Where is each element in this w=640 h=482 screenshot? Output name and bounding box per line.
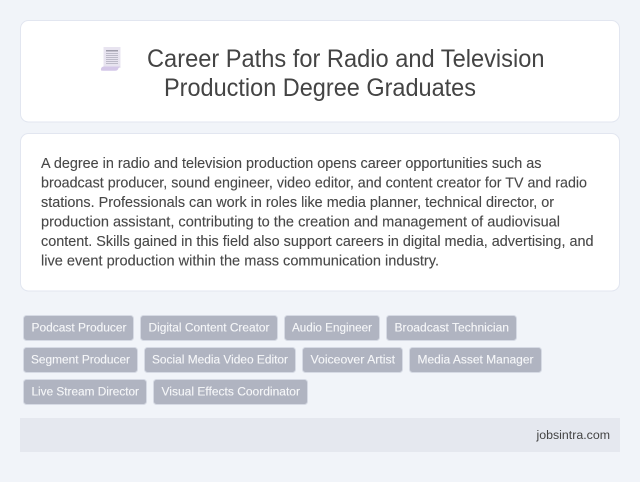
tag: Visual Effects Coordinator bbox=[154, 380, 308, 404]
text block: description: live event production within the mass communication industry. bbox=[41, 254, 439, 270]
panel: title card bbox=[20, 20, 620, 122]
tag: Live Stream Director: Live Stream Director bbox=[32, 384, 139, 398]
title: Career Paths for Radio and Television bbox=[147, 45, 544, 73]
tag: Live Stream Director bbox=[24, 380, 146, 404]
tag: Audio Engineer bbox=[284, 316, 380, 340]
tag: Segment Producer bbox=[24, 348, 138, 372]
tag: Social Media Video Editor bbox=[144, 348, 296, 372]
tag: Visual Effects Coordinator: Visual Effects Coordinator bbox=[162, 384, 300, 398]
panel: career tags bbox=[24, 316, 542, 404]
tag: Media Asset Manager: Media Asset Manager bbox=[418, 352, 534, 366]
tag: Voiceover Artist: Voiceover Artist bbox=[310, 352, 396, 366]
title: Production Degree Graduates bbox=[164, 74, 476, 102]
tag: Audio Engineer: Audio Engineer bbox=[292, 320, 372, 334]
tag: Digital Content Creator: Digital Content Creator bbox=[148, 320, 270, 334]
text block: description bbox=[41, 156, 594, 270]
tag: Media Asset Manager bbox=[410, 348, 542, 372]
icon: paper scroll document bbox=[101, 47, 120, 71]
tag: Social Media Video Editor: Social Media Video Editor bbox=[152, 352, 288, 366]
text block: description: stations. Professionals can work in roles like media planner, technical director, or bbox=[41, 195, 554, 211]
footer bar bbox=[20, 418, 620, 452]
tag: Voiceover Artist bbox=[302, 348, 402, 372]
tag: Broadcast Technician: Broadcast Technician bbox=[394, 320, 509, 334]
panel: description card bbox=[20, 134, 620, 291]
tag: Broadcast Technician bbox=[386, 316, 516, 340]
tag: Podcast Producer bbox=[24, 316, 134, 340]
tag: Digital Content Creator bbox=[140, 316, 278, 340]
text block: description: broadcast producer, sound engineer, video editor, and content creator for TV and radio bbox=[41, 176, 587, 192]
text block: description: production assistant, contributing to the creation and management of audiovisual bbox=[41, 214, 560, 230]
text block: description: A degree in radio and television production opens career opportunities such as bbox=[41, 156, 542, 172]
title bbox=[147, 45, 544, 102]
tag: Segment Producer: Segment Producer bbox=[31, 352, 130, 366]
text block: description: content. Skills gained in this field also support careers in digital media, advertising, and bbox=[41, 234, 594, 250]
footer text: source: jobsintra.com bbox=[536, 428, 610, 442]
tag: Podcast Producer: Podcast Producer bbox=[32, 320, 126, 334]
